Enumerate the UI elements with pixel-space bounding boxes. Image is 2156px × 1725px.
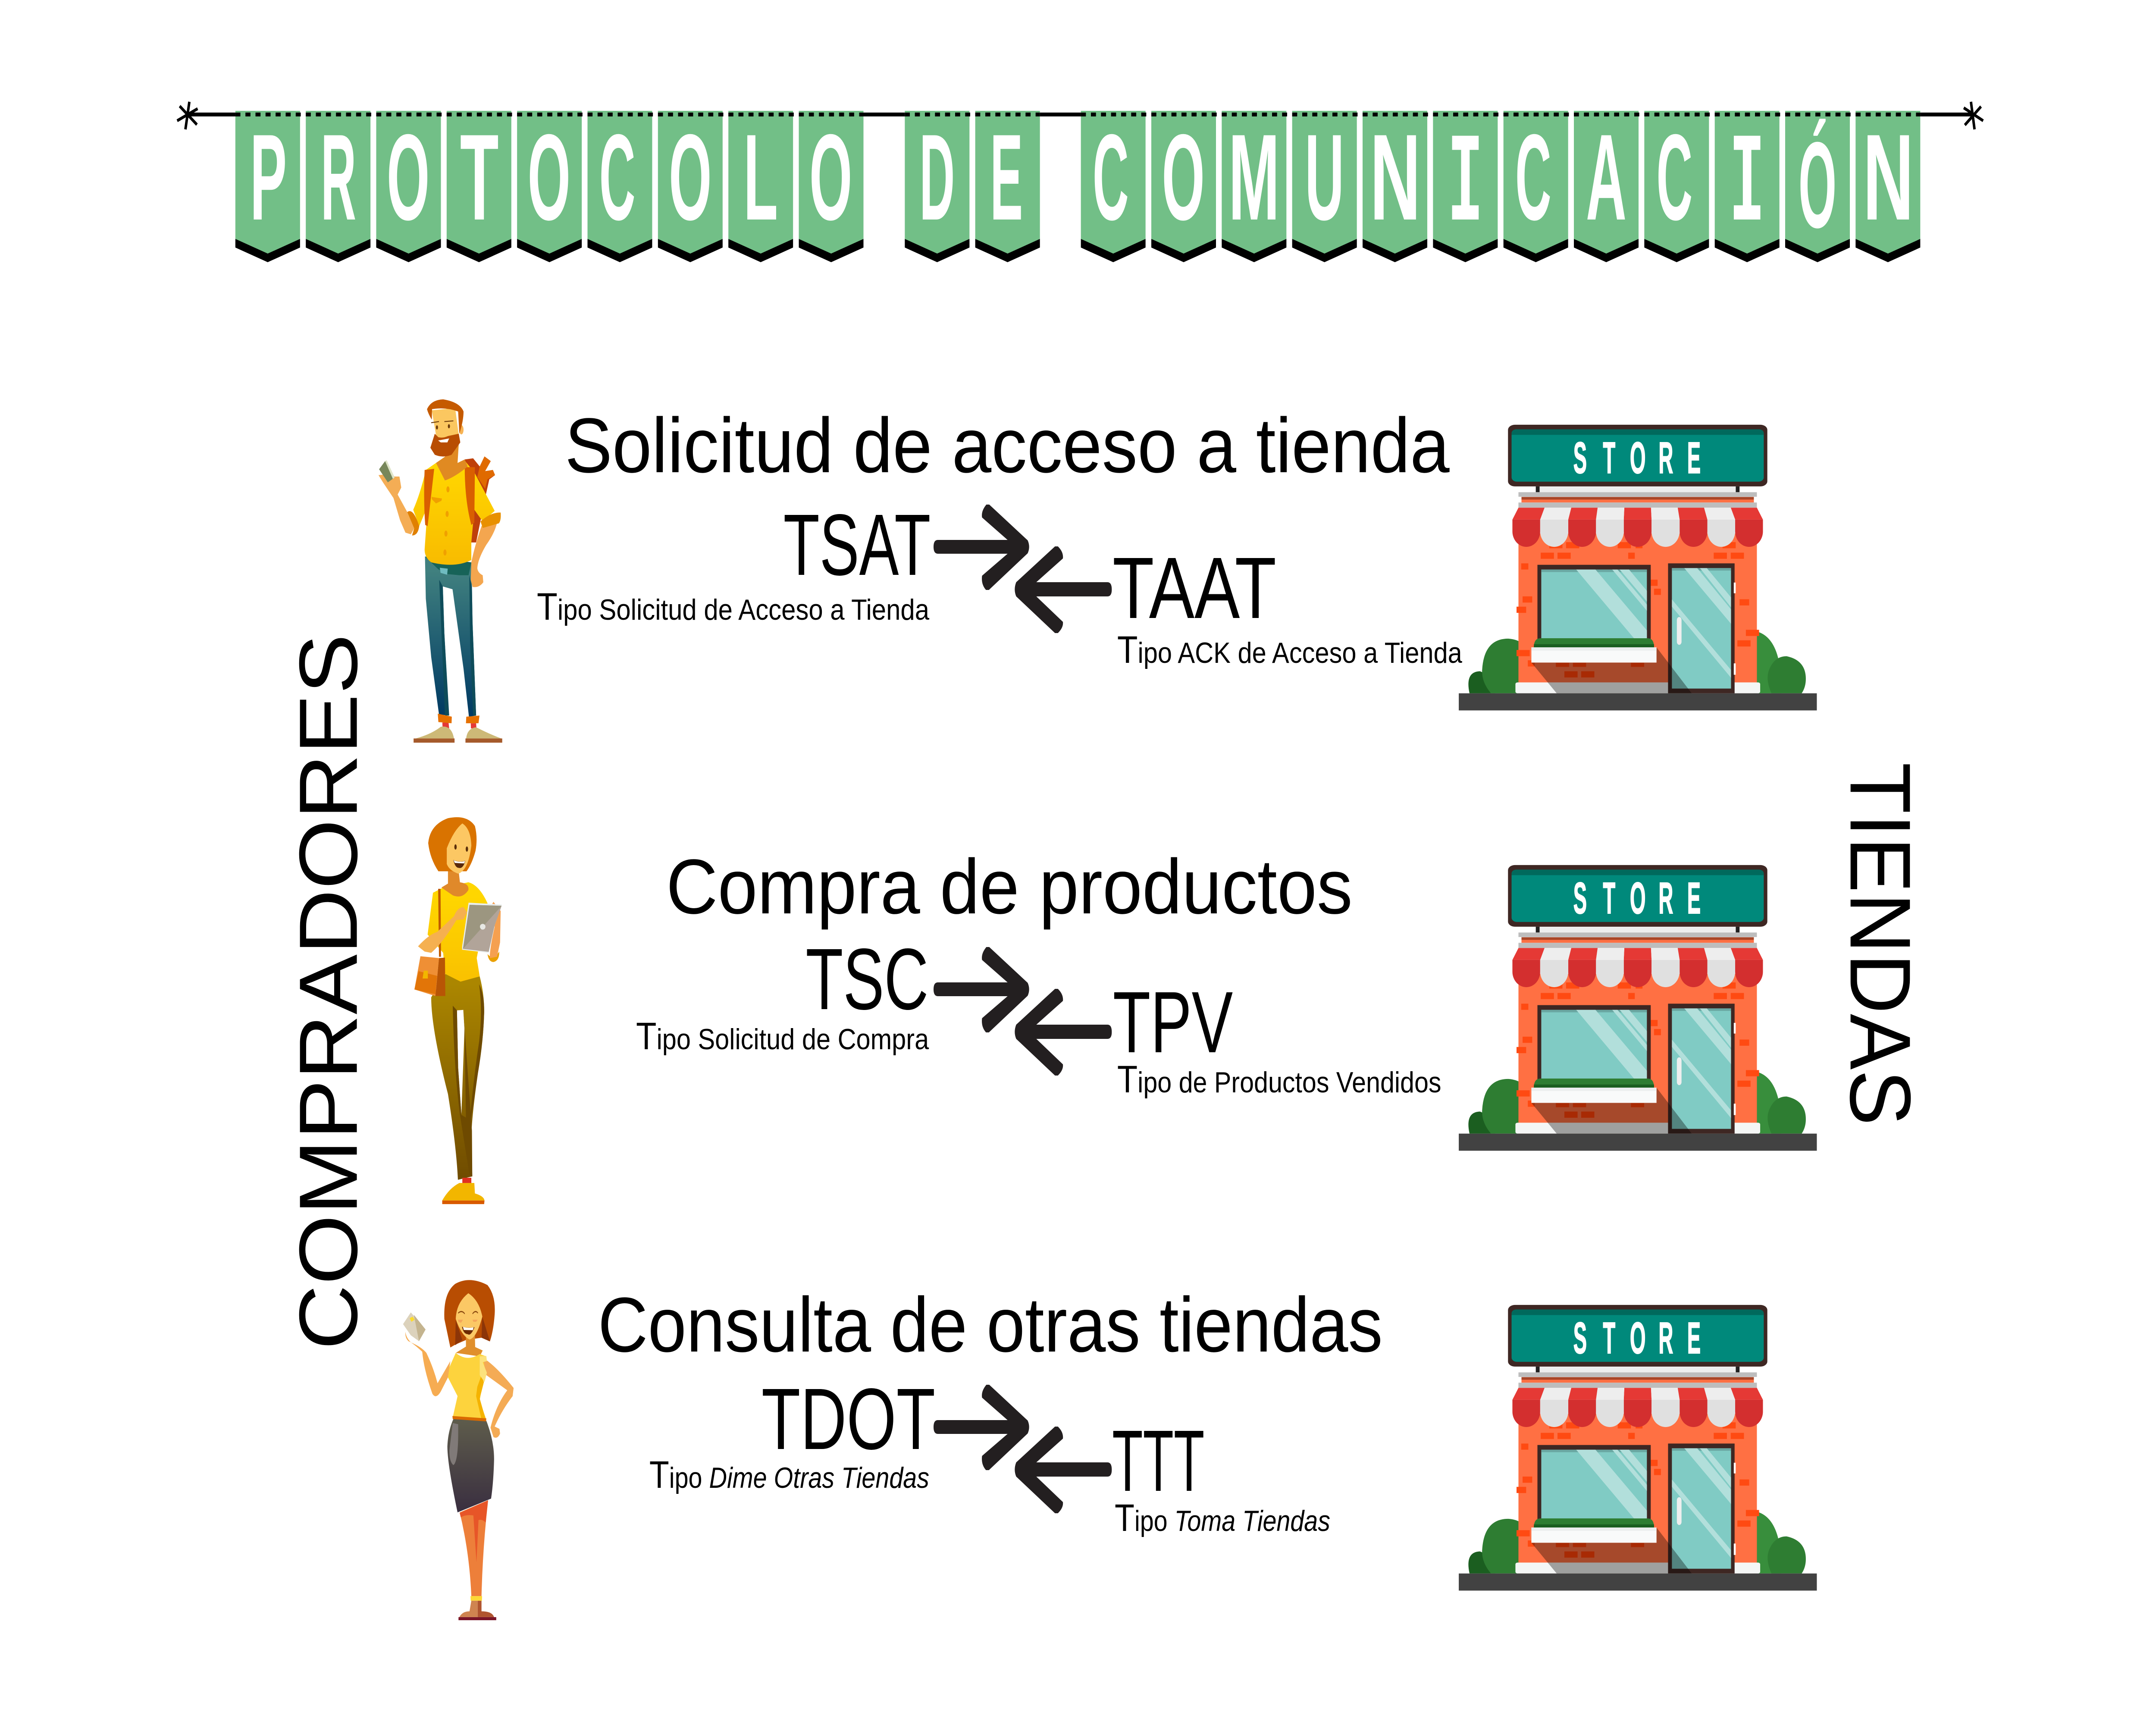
caption: TAAT: Tipo ACK de Acceso a Tienda <box>1117 629 1462 671</box>
caption: TDOT: Tipo Dime Otras Tiendas <box>649 1454 929 1496</box>
title letters: O <box>528 109 570 246</box>
buyer: woman with tablet <box>414 817 502 1204</box>
title letters: E <box>990 109 1023 245</box>
title letters: O <box>387 109 429 246</box>
title letters: A <box>1586 109 1626 245</box>
title letters: M <box>1228 109 1279 246</box>
title letters: L <box>743 109 778 245</box>
caption: TSAT: Tipo Solicitud de Acceso a Tienda <box>537 586 929 628</box>
code: TDOT: TDOT <box>761 1371 935 1468</box>
right star <box>1964 102 1983 129</box>
title letters: C <box>1656 109 1692 245</box>
store sign text: STORE <box>1573 433 1701 483</box>
title letters: O <box>809 109 852 246</box>
side label: tiendas: TIENDAS <box>1832 762 1929 1126</box>
title letters: C <box>599 109 636 245</box>
caption: TPV: Tipo de Productos Vendidos <box>1117 1058 1441 1101</box>
caption: TTT: Tipo Toma Tiendas <box>1115 1497 1330 1540</box>
code: TPV: TPV <box>1113 974 1233 1071</box>
stitched string over flags <box>235 113 1921 116</box>
title letters <box>250 108 1914 258</box>
heading: solicitud: Solicitud de acceso a tienda <box>565 402 1450 489</box>
banner string <box>187 113 1973 116</box>
title letters: Ó <box>1799 116 1836 253</box>
arrow pair: row 1 <box>934 505 1112 633</box>
title letters: O <box>669 109 712 246</box>
title letters: R <box>321 109 356 245</box>
buyer: woman with card <box>403 1280 514 1620</box>
title letters: C <box>1093 109 1129 245</box>
left star <box>177 102 197 129</box>
store: row 1 <box>1459 425 1817 710</box>
title letters: U <box>1305 109 1344 246</box>
title letters: N <box>1863 109 1914 246</box>
caption: TSC: Tipo Solicitud de Compra <box>636 1015 929 1058</box>
arrow pair: row 3 <box>934 1385 1112 1513</box>
title banner <box>177 102 1983 262</box>
title letters: P <box>250 109 287 246</box>
title letters: T <box>460 108 498 245</box>
code: TAAT: TAAT <box>1112 540 1276 637</box>
heading: compra: Compra de productos <box>666 844 1353 930</box>
title letters: I <box>1729 114 1765 258</box>
buyer: man with phone <box>379 399 502 743</box>
store sign text: STORE <box>1573 1313 1701 1363</box>
title letters: N <box>1370 109 1421 246</box>
arrow pair: row 2 <box>934 947 1112 1076</box>
store: row 3 <box>1459 1305 1817 1590</box>
title letters: C <box>1515 109 1551 245</box>
flags <box>235 111 1920 262</box>
store: row 2 <box>1459 865 1817 1151</box>
title letters: I <box>1448 114 1483 258</box>
code: TSC: TSC <box>805 931 928 1028</box>
store sign text: STORE <box>1573 873 1701 923</box>
title letters: D <box>919 109 955 245</box>
code: TTT: TTT <box>1112 1413 1204 1509</box>
code: TSAT: TSAT <box>783 497 931 593</box>
heading: consulta: Consulta de otras tiendas <box>598 1282 1383 1368</box>
side label: compradores: COMPRADORES <box>282 634 374 1350</box>
title letters: O <box>1162 109 1205 246</box>
